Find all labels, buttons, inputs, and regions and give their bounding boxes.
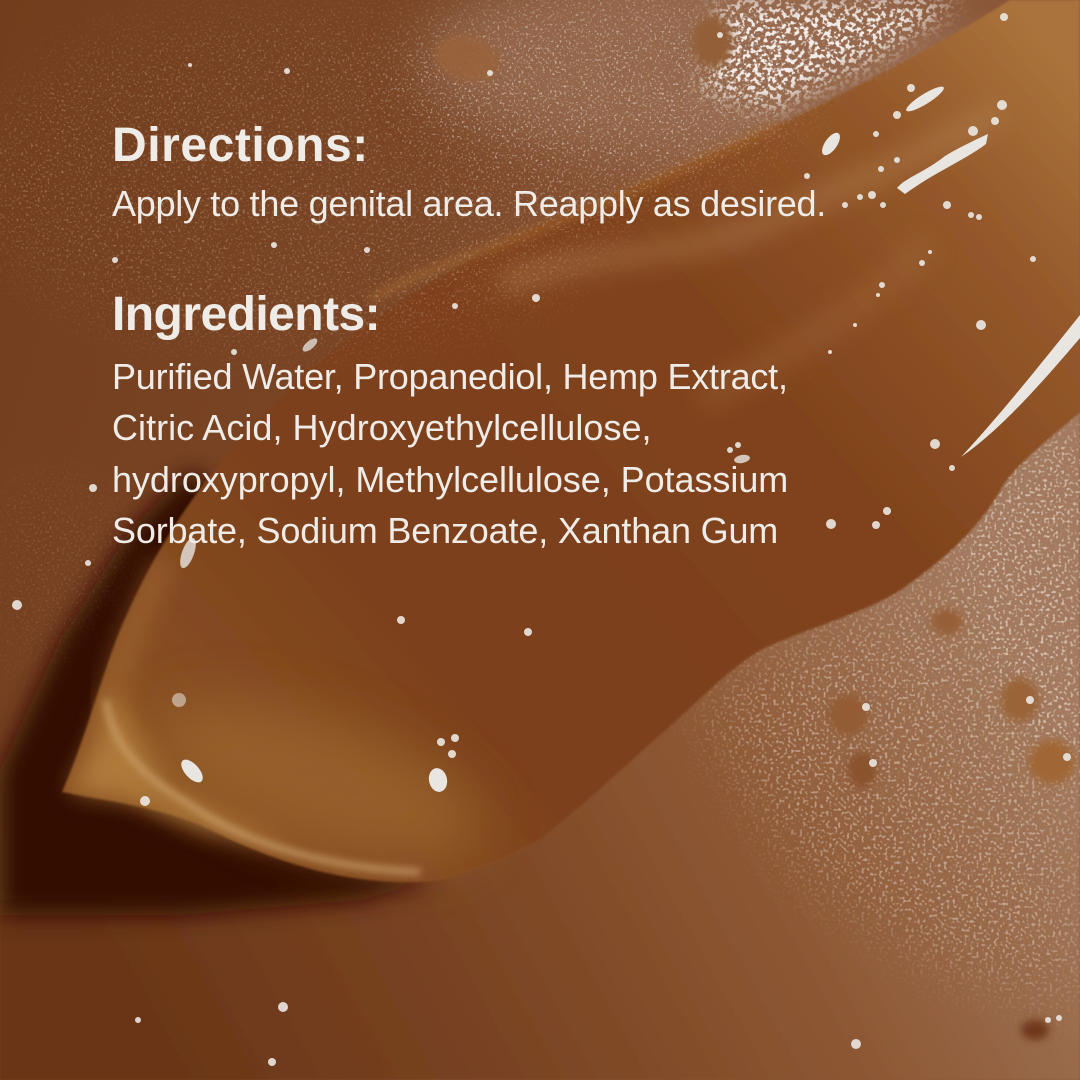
text: ingredients list: Purified Water, Propanediol, Hemp Extract, xyxy=(112,356,788,396)
gel rim highlight xyxy=(106,700,420,872)
gel lower glow xyxy=(140,670,500,890)
gel tip glow xyxy=(68,690,300,850)
lower skin grain xyxy=(685,413,1080,1018)
gel smear xyxy=(62,0,1080,882)
large water droplets xyxy=(429,16,1075,1040)
text: ingredients list: hydroxypropyl, Methylcellulose, Potassium xyxy=(112,458,788,500)
lower right skin xyxy=(0,412,1080,1080)
heading: ingredients: Ingredients: xyxy=(112,288,380,341)
gel left glow xyxy=(108,560,165,720)
heading: directions: Directions: xyxy=(112,119,369,172)
white speculars xyxy=(172,83,1080,794)
text: directions body: Apply to the genital area. Reapply as desired. xyxy=(112,183,826,224)
fine grain droplets xyxy=(0,0,830,673)
text: ingredients list xyxy=(112,356,788,551)
text: ingredients list: Citric Acid, Hydroxyethylcellulose, xyxy=(112,407,652,448)
gel upper ridge xyxy=(370,125,780,300)
gel sheen bands xyxy=(500,110,1000,285)
shadow beside and under the smear xyxy=(0,470,440,915)
text: ingredients list: Sorbate, Sodium Benzoate, Xanthan Gum xyxy=(112,510,778,551)
dense sparkle patch xyxy=(686,0,966,125)
upper sparkling skin tone xyxy=(420,0,980,160)
